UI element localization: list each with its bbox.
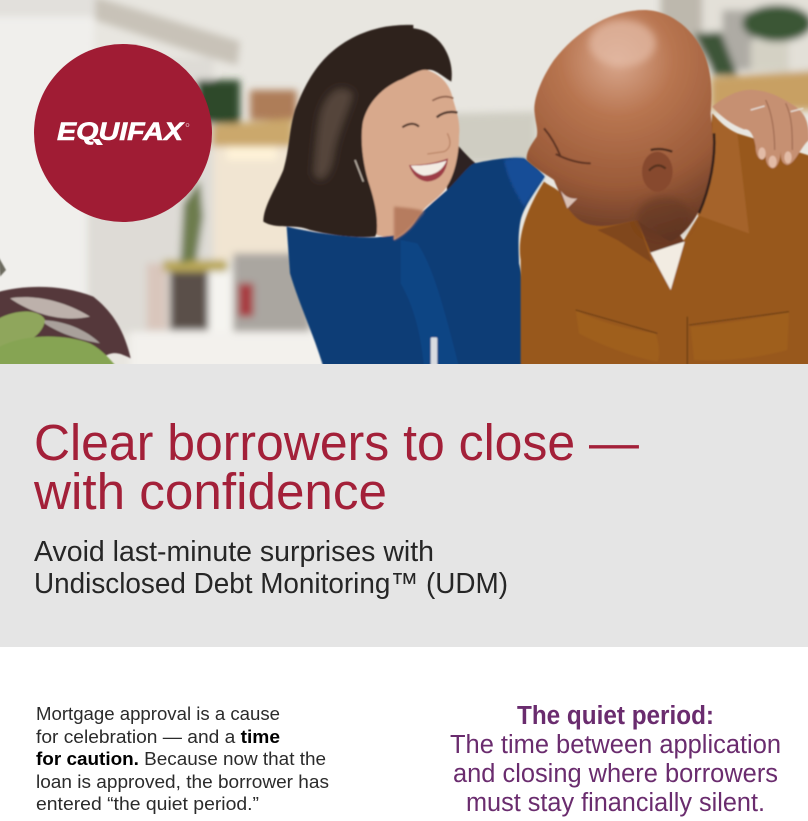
logo badge: Equifax: EQUIFAX	[57, 118, 185, 146]
callout: the quiet period	[450, 702, 781, 817]
heading	[33, 414, 639, 520]
photo: couple laughing in kitchen	[0, 0, 808, 383]
woman	[263, 25, 545, 367]
intro paragraph: for caution. Because now that the	[36, 748, 326, 769]
heading: with confidence	[33, 463, 387, 520]
logo badge: Equifax	[34, 44, 212, 222]
intro paragraph: loan is approved, the borrower has	[36, 771, 329, 792]
callout: the quiet period: and closing where borrowers	[453, 760, 778, 788]
intro paragraph: Mortgage approval is a cause	[36, 703, 280, 724]
hand	[712, 90, 808, 168]
kitchen background	[0, 0, 808, 380]
subheading: Avoid last-minute surprises with	[34, 536, 434, 568]
plant	[0, 257, 131, 367]
subheading	[34, 536, 508, 600]
intro paragraph	[36, 703, 329, 814]
panel: grey title band	[0, 364, 808, 647]
intro paragraph: for celebration — and a time	[36, 726, 280, 747]
subheading: Undisclosed Debt Monitoring™ (UDM)	[34, 568, 508, 600]
heading: Clear borrowers to close —	[34, 414, 639, 471]
callout: the quiet period: The time between application	[450, 731, 781, 759]
intro paragraph: entered “the quiet period.”	[36, 793, 259, 814]
callout: the quiet period: The quiet period:	[517, 702, 714, 730]
callout: the quiet period: must stay financially silent.	[466, 789, 765, 817]
man	[520, 10, 808, 367]
